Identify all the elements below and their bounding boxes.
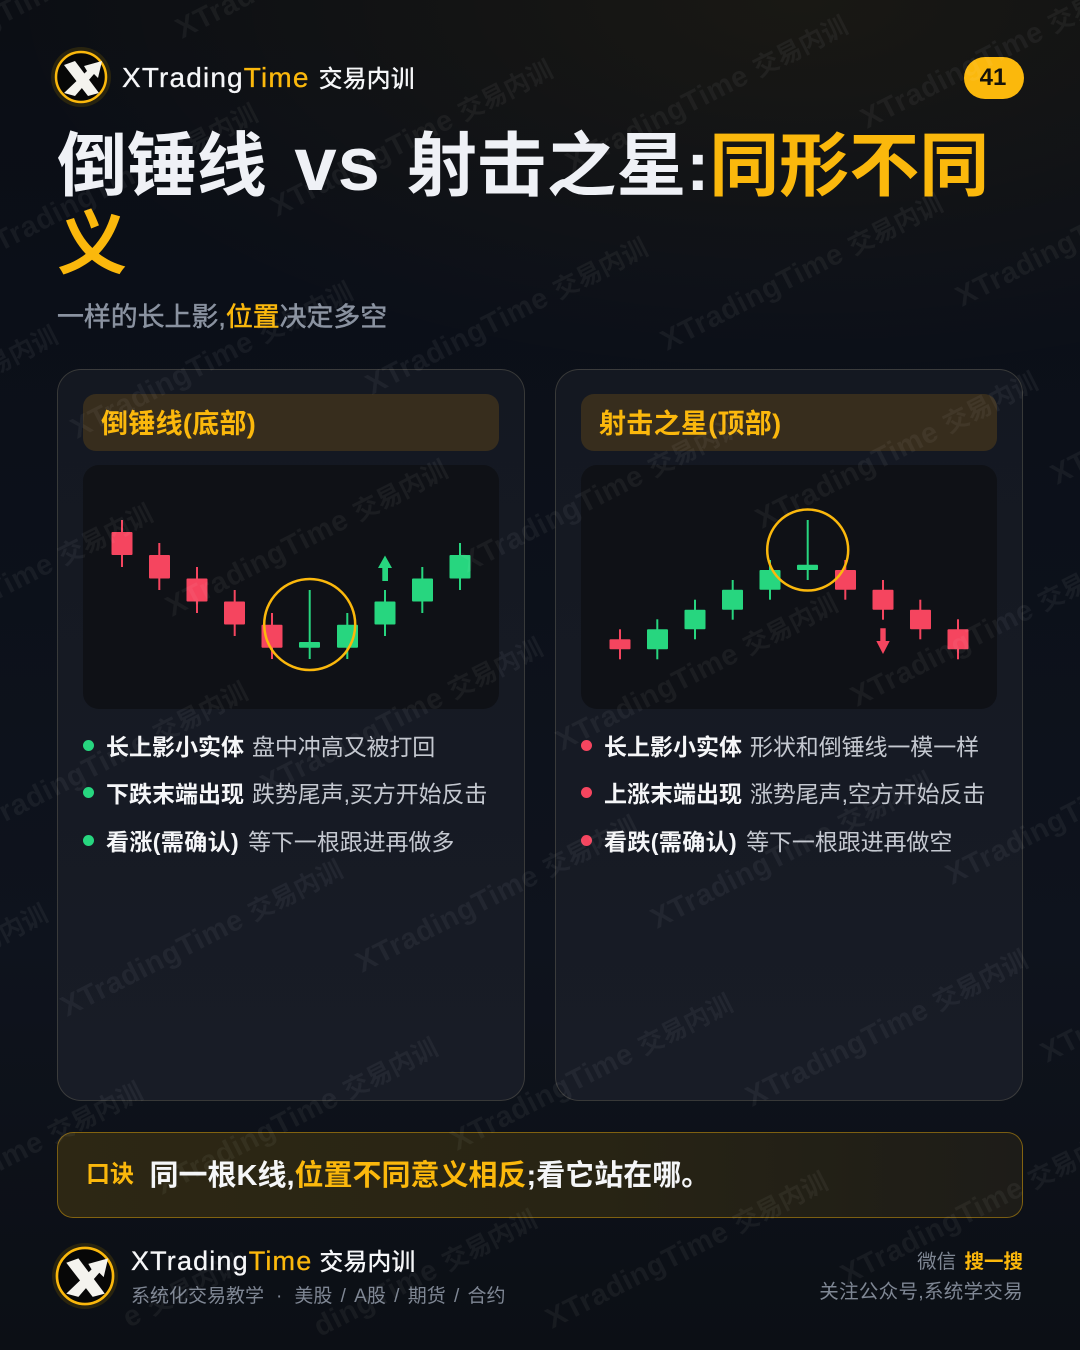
heading: inverted hammer: 倒锤线(底部): [101, 409, 256, 439]
heading: inverted hammer: [83, 394, 499, 451]
chart: shooting star at top: [581, 465, 997, 709]
watermark: XTradingTime 交易内训: [751, 365, 1043, 535]
watermark: XTradingTime 交易内训: [161, 453, 453, 623]
watermark: XTradingTime 交易内训: [56, 853, 348, 1023]
watermark: XTradingTime 交易内训: [456, 409, 748, 579]
mnemonic label: 口诀: [86, 1161, 134, 1188]
watermark: XTradingTime 交易内训: [361, 231, 653, 401]
watermark: XTradingTime 交易内训: [266, 53, 558, 223]
bullet: long upper shadow: 长上影小实体 盘中冲高又被打回: [106, 734, 435, 760]
title: 义: [57, 205, 127, 283]
bullet: bullish, needs confirmation: 看涨(需确认) 等下一根跟进再做多: [106, 829, 454, 855]
heading: shooting star: 射击之星(顶部): [599, 409, 781, 439]
chart: inverted hammer at bottom: [83, 465, 499, 709]
panel: inverted hammer: [57, 369, 525, 1101]
watermark: XTradingTime 交易内训: [646, 765, 938, 935]
subtitle: 一样的长上影,位置决定多空: [57, 302, 387, 332]
footer tagline: 系统化交易教学 · 美股 / A股 / 期货 / 合约: [131, 1286, 506, 1307]
bullet: end of downtrend: 下跌末端出现 跌势尾声,买方开始反击: [106, 781, 487, 807]
bullet: same long upper shadow: 长上影小实体 形状和倒锤线一模一样: [604, 734, 979, 760]
page number badge: 41: [980, 64, 1006, 91]
panel: shooting star: [555, 369, 1023, 1101]
watermark: XTradingTime 交易内训: [656, 187, 948, 357]
heading: shooting star: [581, 394, 997, 451]
mnemonic text: 同一根K线,位置不同意义相反;看它站在哪。: [150, 1160, 710, 1192]
watermark: XTradingTime 交易内训: [66, 275, 358, 445]
footer brand name: XTradingTime 交易内训: [131, 1246, 415, 1276]
watermark: XTradingTime 交易内训: [351, 809, 643, 979]
watermark: XTradingTime 交易内训: [256, 631, 548, 801]
bullet: bearish, needs confirmation: 看跌(需确认) 等下一根跟进再做空: [604, 829, 952, 855]
watermark: dingTime 交易内训: [309, 1203, 542, 1343]
title: 倒锤线 vs 射击之星:同形不同: [57, 122, 989, 207]
header logo: [51, 47, 111, 107]
watermark: XTradingTime 交易内训: [741, 943, 1033, 1113]
header brand name: XTradingTime 交易内训: [122, 62, 415, 93]
watermark: XTradingTime 交易内训: [541, 1165, 833, 1335]
page number badge: [964, 57, 1024, 99]
title: [57, 122, 989, 283]
bullet: end of uptrend: 上涨末端出现 涨势尾声,空方开始反击: [604, 781, 985, 807]
watermark: e 交易内训: [118, 1248, 246, 1334]
watermark: XTradingTime 交易内训: [446, 987, 738, 1157]
watermark: XTradingTime 交易内训: [151, 1031, 443, 1201]
watermark: XTradingTime 交易内训: [561, 9, 853, 179]
watermark: XTradingTime 交易内训: [551, 587, 843, 757]
callout: mnemonic: [57, 1132, 1023, 1218]
footer follow note: 关注公众号,系统学交易: [819, 1281, 1023, 1303]
footer logo: [52, 1243, 118, 1309]
footer wechat search: 微信 搜一搜: [917, 1251, 1023, 1273]
